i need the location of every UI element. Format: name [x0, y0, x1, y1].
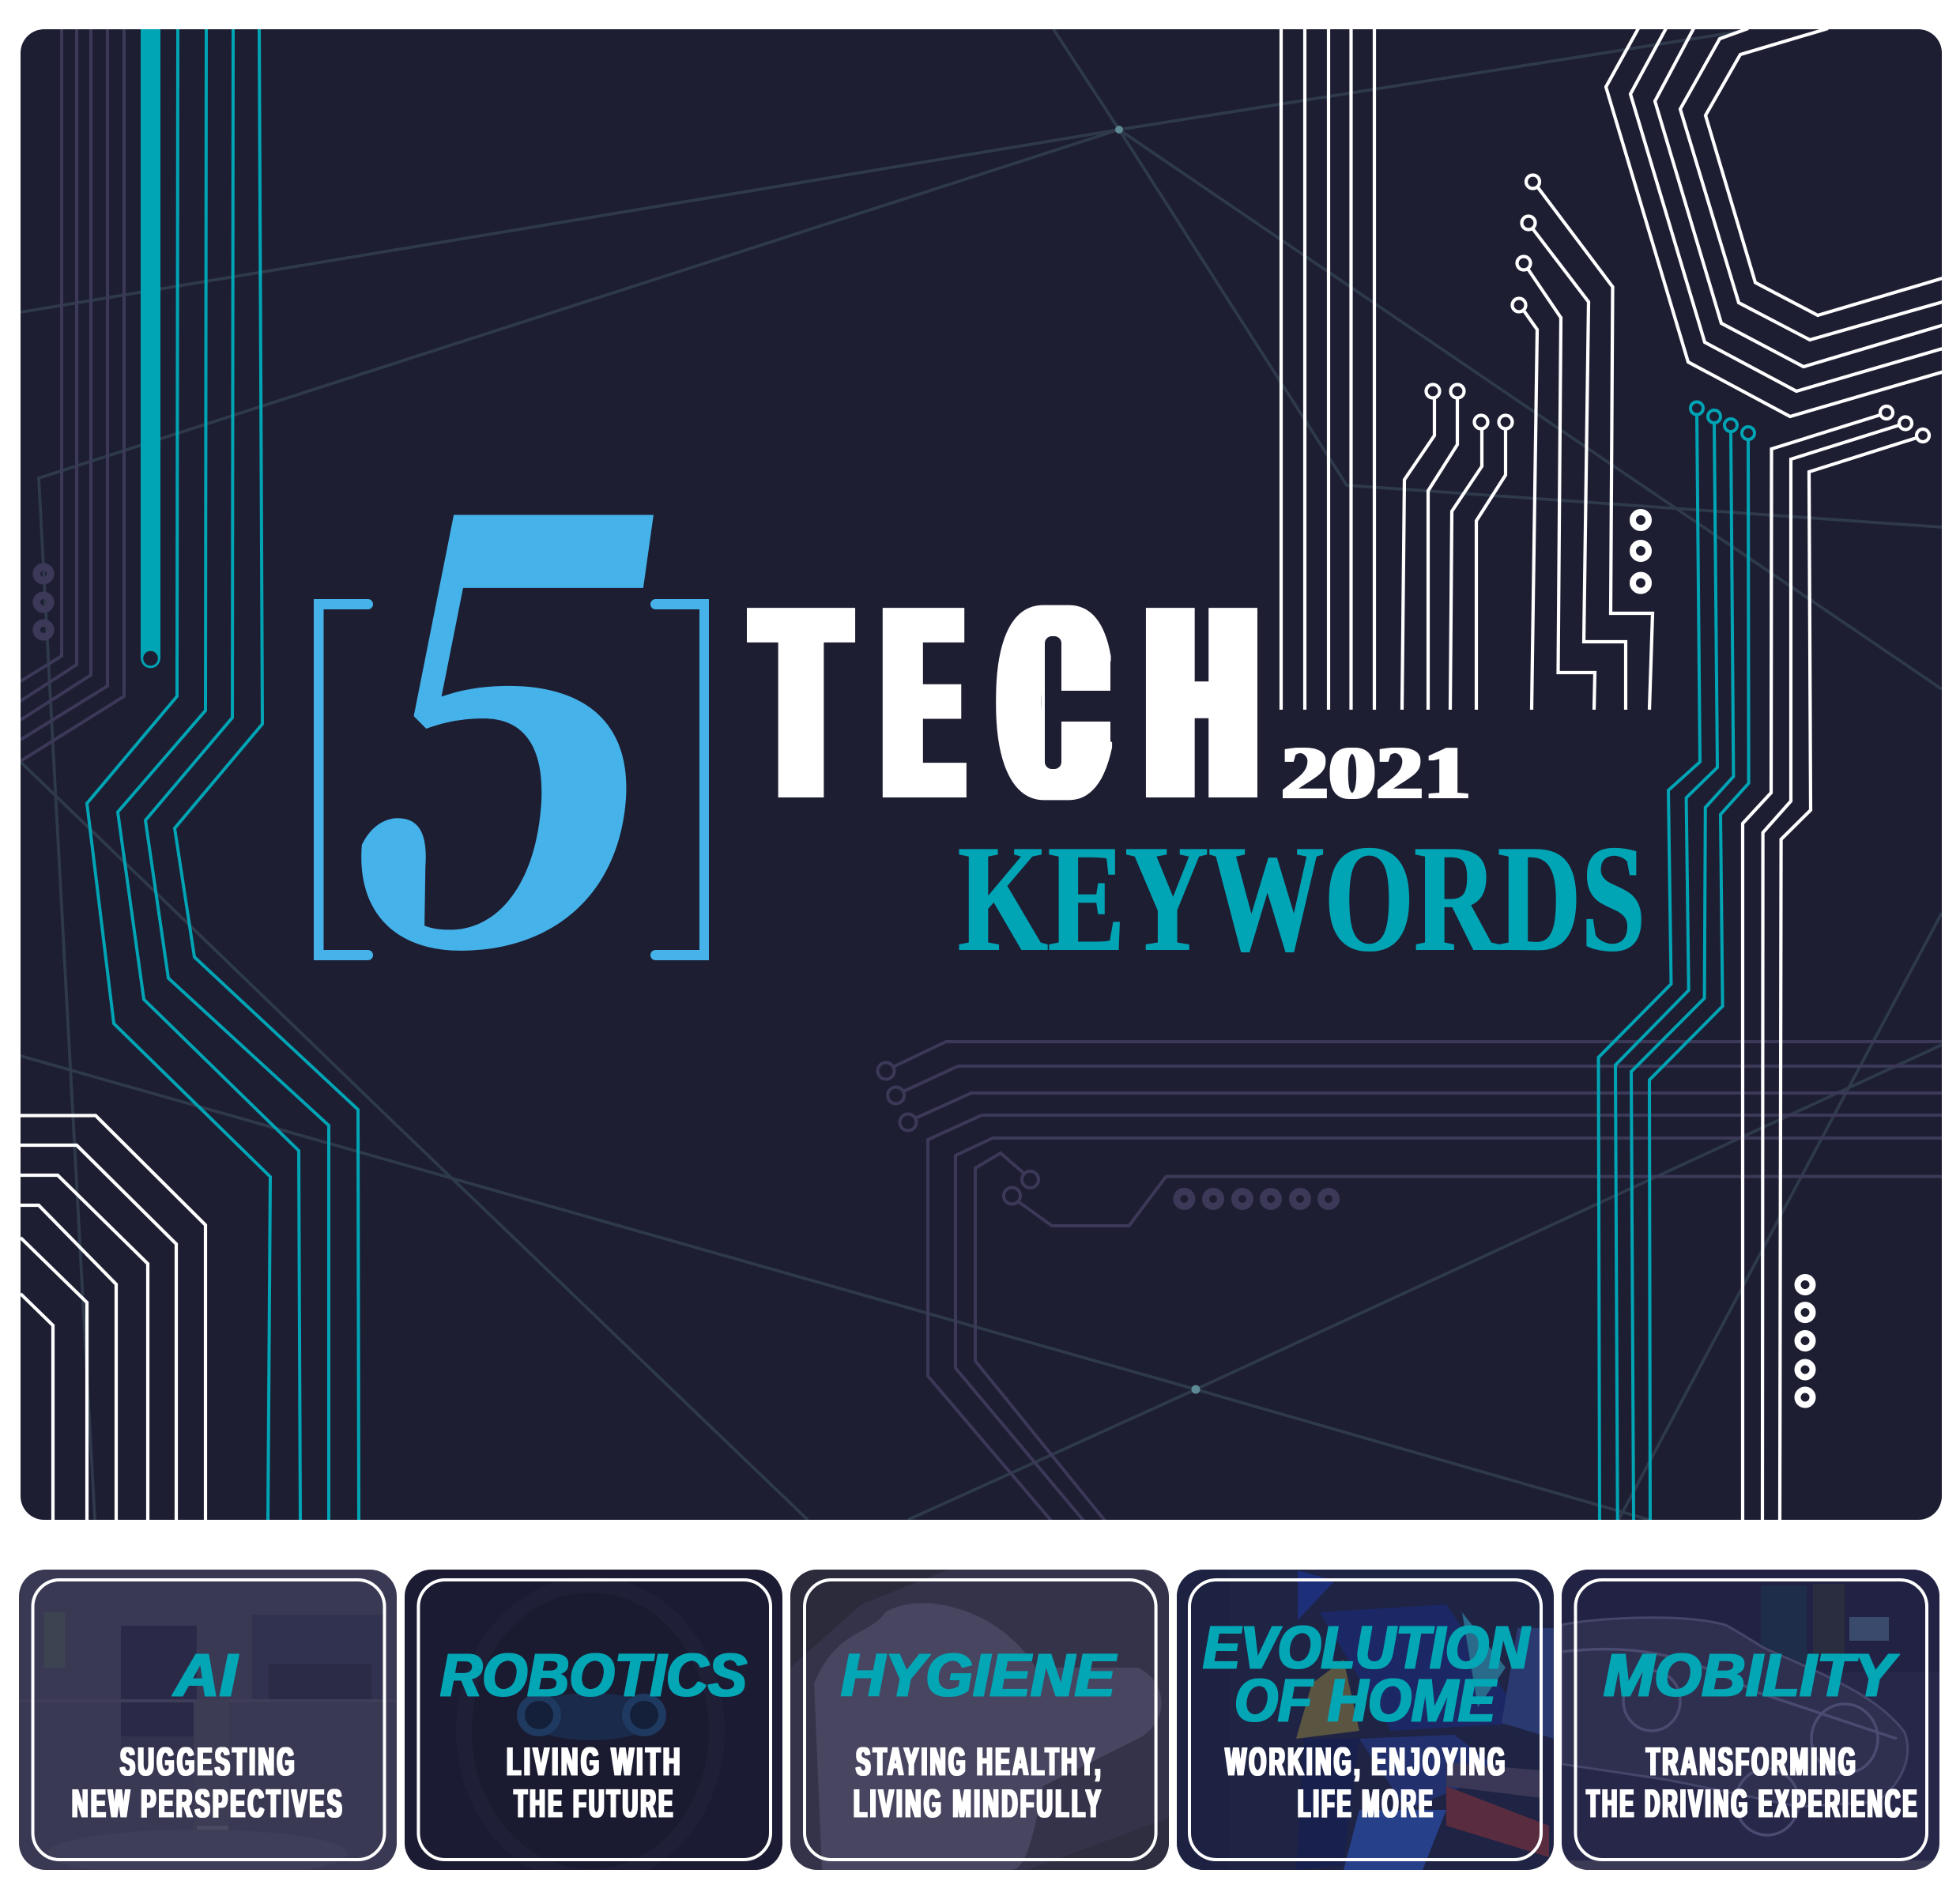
- right bracket: [650, 599, 709, 960]
- dim dots: left: [36, 567, 51, 637]
- dim dots: row of six: [1177, 1192, 1336, 1206]
- white circuit traces with ring ends: [1402, 175, 1653, 710]
- white traces: top centre verticals: [1281, 29, 1374, 710]
- card 4: EVOLUTION OF HOME: [1177, 1570, 1554, 1870]
- left bracket: [314, 599, 373, 960]
- card 5 description: [1587, 1740, 1919, 1826]
- card 3 border: [805, 1580, 1156, 1860]
- title word: TECH: E: [888, 552, 958, 853]
- card 4 description: [1225, 1740, 1508, 1826]
- title word: TECH: C: [1003, 552, 1103, 853]
- card 1 description: SUGGESTING: [120, 1740, 297, 1784]
- white traces: bottom left: [21, 1116, 205, 1520]
- card 3 photo background: [790, 1570, 1169, 1870]
- title word: TECH: T: [758, 552, 844, 853]
- faint network lines: [21, 29, 1942, 1520]
- card 5 heading: MOBILITY: [1604, 1642, 1900, 1709]
- card 1 heading: AI: [172, 1642, 239, 1709]
- white octagon traces: top right: [1606, 28, 1943, 417]
- card 2 description: [507, 1740, 683, 1826]
- card 4 description: WORKING, ENJOYING: [1225, 1740, 1508, 1784]
- circuit artwork layer: [21, 28, 1943, 1521]
- card 5 photo background: [1562, 1570, 1939, 1870]
- card 4 heading: EVOLUTION: [1203, 1614, 1530, 1682]
- card 2: ROBOTICS: [405, 1570, 782, 1885]
- teal traces: left: [87, 29, 359, 1520]
- card 1: AI: [19, 1570, 397, 1877]
- card 4 description: LIFE MORE: [1298, 1781, 1435, 1826]
- card 3 description: STAYING HEALTHY,: [856, 1740, 1103, 1784]
- white dots: five: [1797, 1277, 1813, 1405]
- year: 2021: 2021: [1281, 733, 1471, 814]
- teal traces: right side with ring ends: [1598, 401, 1755, 1520]
- dim traces: top left: [21, 29, 124, 761]
- card 1 border: [33, 1580, 384, 1860]
- title word: TECH: H: [1151, 552, 1253, 853]
- card 2 description: THE FUTURE: [514, 1781, 675, 1826]
- white traces: right side with ring ends: [1743, 406, 1929, 1520]
- card 4 photo background: [1177, 1570, 1554, 1870]
- card 2 heading: ROBOTICS: [440, 1642, 747, 1709]
- card 5: MOBILITY: [1562, 1570, 1939, 1870]
- faint network nodes: [1115, 126, 1200, 1394]
- card 4 heading: OF HOME: [1234, 1667, 1497, 1735]
- card 2 photo background: [405, 1570, 782, 1885]
- card 4 heading: [1203, 1614, 1530, 1735]
- card 3 heading: HYGIENE: [841, 1642, 1118, 1709]
- white dots: three: [1633, 512, 1649, 591]
- card 1 description: [72, 1740, 345, 1826]
- thick teal bar with end cap: [141, 29, 160, 667]
- card 3 description: [854, 1740, 1103, 1826]
- card 1 photo background: [19, 1570, 397, 1877]
- dim traces: bottom centre: [877, 1042, 1943, 1521]
- card 3 description: LIVING MINDFULLY: [854, 1781, 1103, 1826]
- card 1 description: NEW PERSPECTIVES: [72, 1781, 345, 1826]
- big number 5: 5: [303, 258, 721, 1111]
- card 4 border: [1189, 1580, 1541, 1860]
- card 3: HYGIENE: [790, 1570, 1169, 1870]
- title word: KEYWORDS: KEYWORDS: [958, 813, 1645, 984]
- card 2 border: [418, 1580, 771, 1860]
- panel: main dark circuit background: [21, 29, 1942, 1520]
- card 5 border: [1576, 1580, 1927, 1860]
- card 2 description: LIVING WITH: [507, 1740, 683, 1784]
- title word: TECH: [758, 552, 1253, 853]
